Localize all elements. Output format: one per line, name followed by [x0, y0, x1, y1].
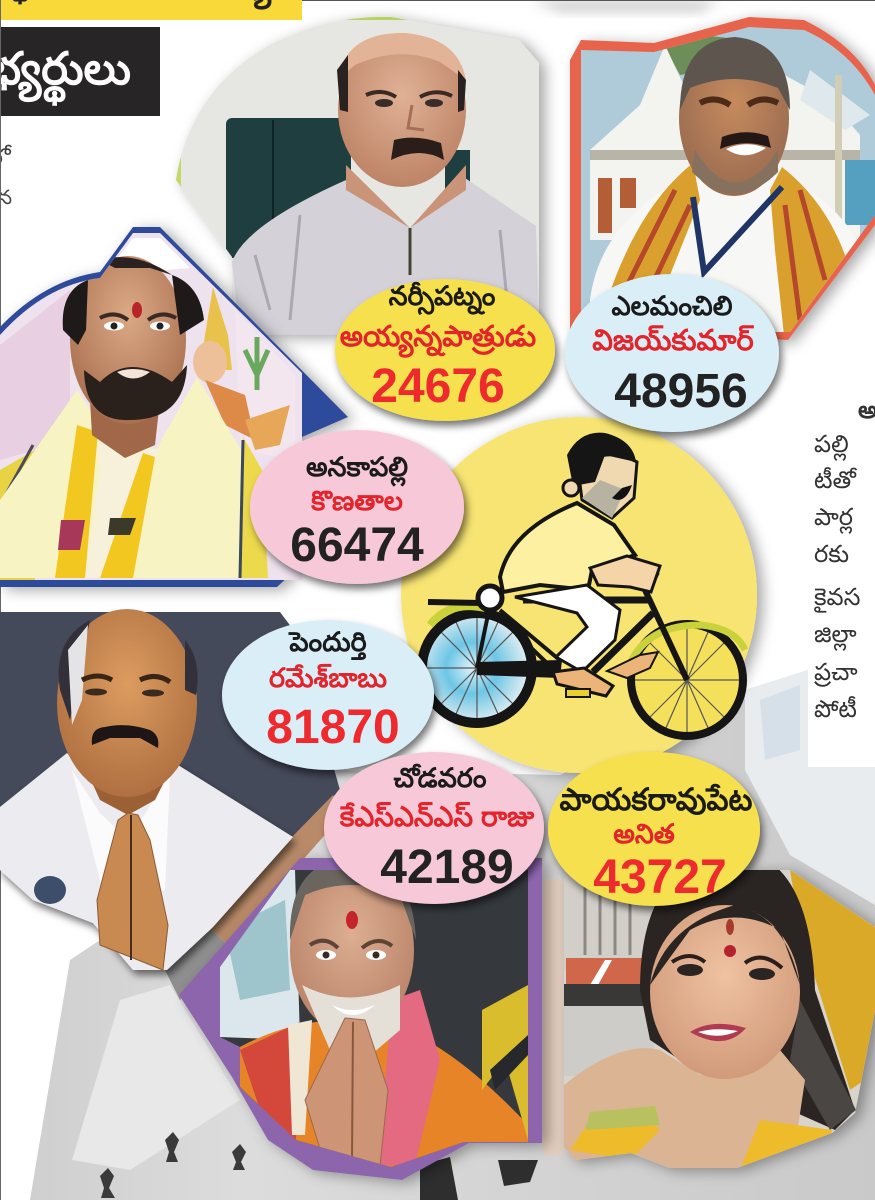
- callout: Anakapalli: [250, 430, 464, 584]
- callout: Chodavaram: చోడవరం: [393, 763, 487, 793]
- callout: Payakaraopeta: పాయకరావుపేట: [559, 782, 753, 817]
- right clipped article text: జిల్లా: [814, 621, 857, 651]
- callout: Anakapalli: 66474: [290, 519, 424, 572]
- right clipped article text: [808, 397, 875, 767]
- right clipped article text: ప్రచా: [814, 659, 858, 687]
- callout: Yelamanchili: [565, 274, 779, 432]
- callout: Narsipatnam: 24676: [371, 360, 505, 413]
- callout: Narsipatnam: అయ్యన్నపాత్రుడు: [340, 321, 536, 358]
- photo: Pendurthi candidate: [0, 609, 345, 1000]
- heading: black label: [0, 27, 160, 116]
- callout: Payakaraopeta: 43727: [593, 851, 727, 904]
- right clipped article text: టీతో: [814, 467, 858, 494]
- callout: Pendurthi: [222, 620, 434, 770]
- callout: Narsipatnam: నర్సీపట్నం: [389, 281, 496, 315]
- arm strip beside photo: [206, 795, 345, 945]
- photo: Anakapalli candidate: [0, 225, 348, 587]
- callout: Chodavaram: 42189: [380, 841, 514, 894]
- callout: Payakaraopeta: [548, 752, 760, 906]
- photo: Narsipatnam candidate: [176, 15, 541, 340]
- photo: Chodavaram candidate: [179, 858, 542, 1180]
- callout: Pendurthi: రమేశ్‌బాబు: [269, 663, 387, 693]
- right clipped article text: కైవస: [814, 584, 861, 613]
- callout: Anakapalli: కొణతాల: [310, 486, 403, 516]
- cartoon: rider on bicycle: [422, 433, 745, 736]
- callout: Payakaraopeta: అనిత: [613, 819, 675, 849]
- callout: Pendurthi: 81870: [266, 701, 400, 754]
- callout: Pendurthi: పెందుర్తి: [288, 627, 367, 661]
- callout: Yelamanchili: విజయ్‌కుమార్: [592, 325, 755, 357]
- left clipped column text: [0, 0, 12, 1200]
- right clipped article text: పార్ల: [814, 504, 854, 534]
- photo: Payakaraopeta candidate: [564, 850, 875, 1180]
- right clipped article text: పోటీ: [814, 696, 857, 723]
- top yellow headline strip: [0, 0, 302, 20]
- callout: Yelamanchili: 48956: [614, 365, 748, 418]
- callout: Yelamanchili: ఎలమంచిలి: [611, 291, 733, 321]
- illustration: yellow circle with cyclist: [401, 417, 757, 773]
- callout: Chodavaram: [324, 752, 544, 904]
- right clipped article text: రకు: [814, 541, 849, 568]
- right clipped article text: పల్లి: [814, 431, 849, 461]
- callout: Narsipatnam: [335, 279, 555, 421]
- callout: Anakapalli: అనకాపల్లి: [306, 452, 408, 487]
- callout: Chodavaram: కేఎస్ఎన్ఎస్ రాజు: [339, 801, 535, 832]
- photo: Yelamanchili candidate: [570, 17, 875, 345]
